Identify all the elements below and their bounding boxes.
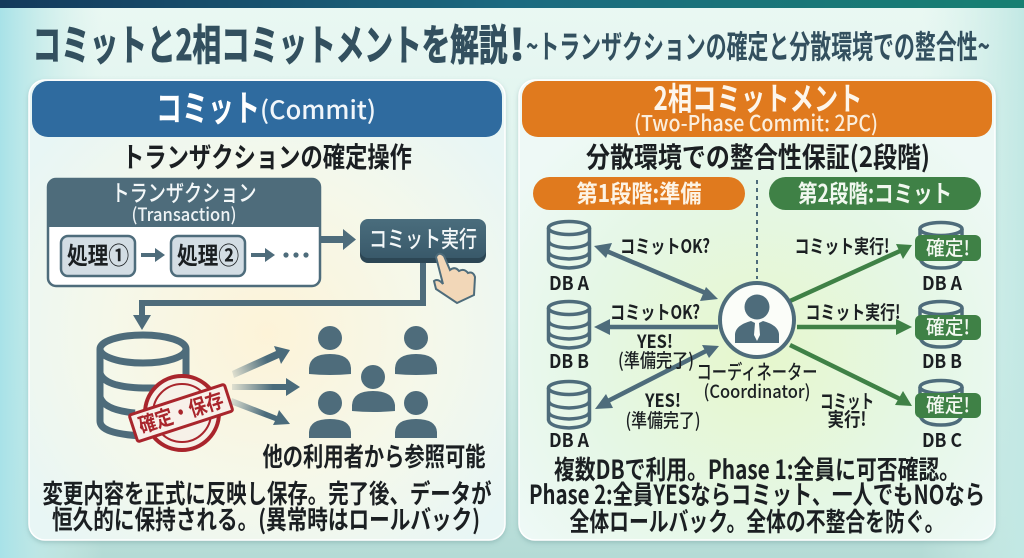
arrow: coordinator and DB A (594, 243, 718, 301)
label: commit run 1: コミット実行! (794, 232, 890, 259)
label: yes 2: (準備完了) (626, 406, 700, 433)
users caption: 他の利用者から参照可能 (262, 437, 486, 474)
label: yes 2 (626, 387, 700, 433)
panel header: (Commit) (260, 91, 376, 127)
transaction box (47, 174, 320, 286)
stamp: 確定・保存 (134, 384, 227, 440)
commit button (360, 219, 486, 263)
icon: hand (434, 254, 475, 303)
top bar (0, 0, 1024, 8)
confirmed database A: 確定! (926, 232, 970, 261)
label: commit run 3: 実行! (828, 405, 866, 432)
label: commit ok 1: コミットOK? (620, 232, 710, 259)
arrow: coordinator to DB B (594, 319, 718, 335)
arrow (251, 248, 275, 262)
confirmed database C: DB C (922, 426, 962, 453)
coordinator label: コーディネーター (696, 356, 818, 385)
coordinator label: (Coordinator) (704, 378, 810, 404)
user (309, 326, 351, 375)
database: DB B: DB B (549, 347, 589, 374)
panel header: 2相コミットメント (654, 74, 862, 120)
label: commit ok 2: コミットOK? (610, 298, 700, 325)
confirmed database B: 確定! (926, 311, 970, 340)
phase 1 pill: 第1段階:準備 (576, 174, 702, 209)
label: yes 1: YES! (636, 328, 673, 354)
phase 1 pill (533, 174, 745, 210)
label: commit run 3 (820, 387, 874, 432)
title: コミットと2相コミットメントを解説 (32, 12, 508, 73)
arrow (141, 248, 165, 262)
confirmed database C: 確定! (926, 389, 970, 418)
panel description: 恒久的に保持される。(異常時はロールバック) (52, 500, 480, 537)
panel header (32, 80, 502, 137)
phase divider (756, 180, 758, 279)
panel: commit (29, 80, 505, 540)
label: yes 2: YES! (644, 387, 681, 413)
title: ! (509, 12, 525, 73)
user (395, 391, 437, 438)
arrow: DB replies (595, 345, 719, 409)
icon: coordinator (720, 283, 794, 357)
database: DB B (548, 302, 590, 374)
panel description (529, 450, 985, 539)
green arrows to participants (790, 244, 912, 406)
coordinator label (696, 356, 818, 404)
flow arrow to database (133, 260, 423, 330)
label: yes 1 (618, 328, 694, 373)
transaction box: トランザクション (112, 174, 256, 208)
icon: database (100, 335, 186, 436)
panel description (42, 474, 492, 537)
icon: users (309, 326, 437, 438)
step 2: 処理② (177, 236, 239, 271)
confirmed database C (915, 380, 981, 453)
transaction box: (Transaction) (132, 201, 236, 227)
database: DB A lower (548, 382, 590, 453)
user (395, 326, 437, 375)
arrow to commit button (320, 229, 356, 250)
database: DB A (548, 222, 590, 296)
database: DB A: DB A (549, 269, 590, 296)
panel description: 変更内容を正式に反映し保存。完了後、データが (42, 474, 492, 511)
step 1: 処理① (67, 236, 129, 271)
confirmed database A: DB A (922, 269, 963, 296)
label: yes 1: (準備完了) (618, 346, 694, 373)
confirmed database B: DB B (922, 347, 962, 374)
arrows to users (230, 346, 300, 425)
user (352, 365, 395, 412)
commit button: コミット実行 (369, 220, 477, 254)
confirmed database A (915, 222, 981, 296)
database: DB A lower: DB A (549, 426, 590, 453)
confirmed database B (915, 302, 981, 374)
panel header: (Two-Phase Commit: 2PC) (634, 106, 878, 138)
panel subheading: 分散環境での整合性保証(2段階) (586, 136, 930, 176)
panel header: コミット (156, 80, 260, 132)
label: commit run 3: コミット (820, 387, 874, 414)
phase 2 pill: 第2段階:コミット (798, 174, 952, 209)
panel header (522, 74, 992, 138)
panel background (29, 80, 505, 540)
user (309, 391, 351, 438)
ellipsis (283, 252, 309, 258)
panel: two-phase commit (519, 74, 995, 540)
panel background (519, 80, 995, 540)
label: commit run 2: コミット実行! (806, 298, 900, 325)
panel subheading: トランザクションの確定操作 (122, 136, 412, 176)
